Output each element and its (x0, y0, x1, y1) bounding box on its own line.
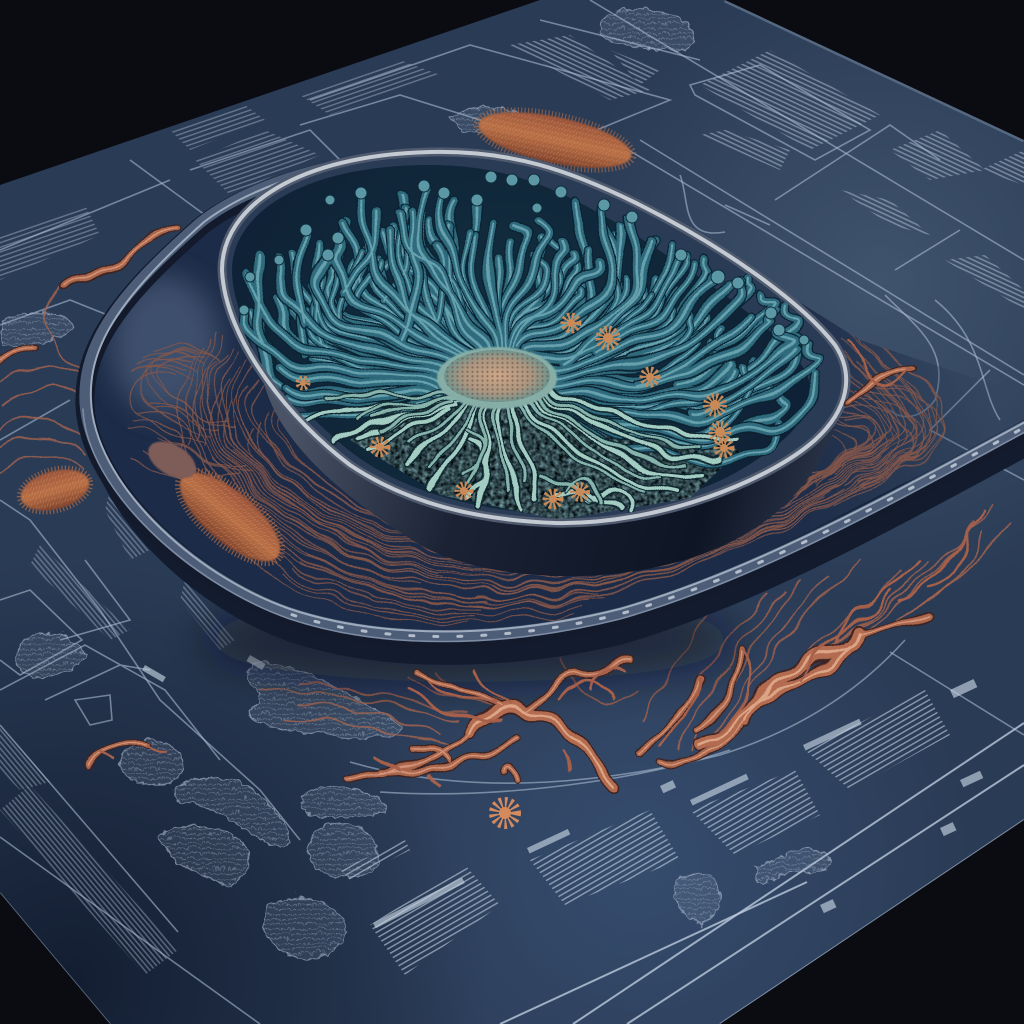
small labels (142, 655, 983, 928)
icon: bacterium large (165, 457, 295, 577)
ring interior highlight (110, 275, 220, 415)
outer ring wall (85, 170, 1024, 665)
ghost organism outlines (0, 8, 828, 958)
icon: bacterium top (473, 100, 637, 180)
long bright rules lower right (500, 723, 1024, 1024)
dish inner surface (222, 152, 846, 523)
orange roots (0, 228, 928, 786)
teal filaments (239, 186, 824, 469)
dish floor (232, 165, 810, 515)
orange star clusters (300, 319, 728, 503)
filament bulbs (239, 171, 809, 345)
text blocks: upper left (0, 60, 440, 280)
text blocks: upper right (510, 35, 1024, 310)
thin red-brown wires beneath roots (0, 285, 1010, 750)
pale lower filaments (300, 375, 740, 510)
text blocks: lower paragraphs (340, 690, 950, 975)
central hub (437, 347, 557, 409)
orange contour wires inside ring (124, 323, 946, 622)
dish outer wall (262, 375, 846, 576)
icon: bacterium faded (142, 434, 202, 486)
orange root twigs (100, 340, 985, 785)
ring metallic rim (83, 150, 1024, 642)
icon: bacterium left (15, 461, 95, 519)
dish (222, 152, 846, 576)
mottled ground (350, 405, 740, 520)
top edge of sheet (725, 0, 1024, 140)
text blocks: lower left column (0, 490, 235, 975)
ring interior (85, 150, 1024, 632)
dish rim (222, 152, 846, 523)
icon: orange star on sheet (499, 807, 511, 819)
shadow of ring on sheet (200, 598, 740, 682)
dish contents (232, 156, 820, 520)
